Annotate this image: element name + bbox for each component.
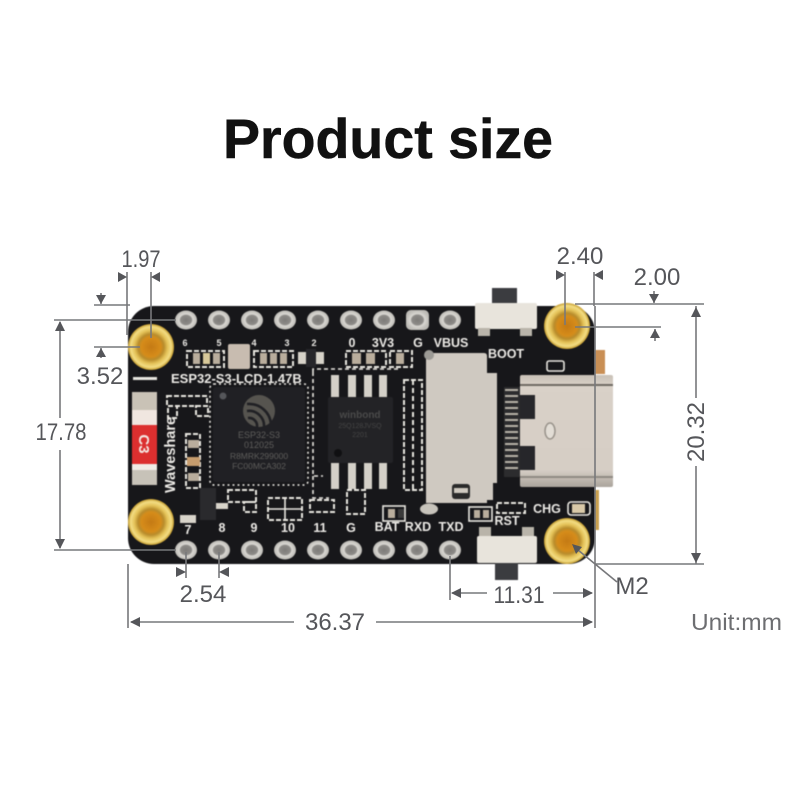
gold mounting holes (128, 303, 590, 564)
silkscreen pin labels: 8 (219, 521, 226, 535)
Waveshare silkscreen: Waveshare (163, 417, 179, 493)
silkscreen pin labels: BAT (375, 520, 400, 534)
dimension 2.54 (176, 552, 229, 608)
silkscreen pin labels: VBUS (434, 336, 468, 350)
dimension 36.37: 36.37 (305, 609, 365, 636)
dimension 3.52 (77, 293, 140, 390)
bottom header pads (175, 540, 461, 560)
silkscreen pin labels: 2 (311, 338, 317, 348)
silkscreen pin labels: 0 (349, 336, 356, 350)
top small components (187, 344, 412, 369)
dimension 36.37 (128, 306, 595, 636)
C3 red antenna component: C3 (135, 434, 152, 454)
dimension 11.31: 11.31 (494, 582, 544, 609)
ESP32-S3 chip (210, 384, 308, 485)
chip marking (230, 430, 288, 471)
small pad near USB top (547, 361, 564, 371)
silkscreen pin labels: BOOT (488, 347, 524, 361)
RST switch (477, 527, 537, 580)
CHG and RST small components (420, 350, 590, 521)
dimension 2.40: 2.40 (557, 243, 603, 270)
silkscreen pin labels: 3 (284, 338, 290, 348)
callout M2 (572, 544, 649, 600)
bottom small components (180, 488, 405, 523)
silkscreen pin labels: 5 (216, 338, 222, 348)
dimension 20.32: 20.32 (683, 402, 710, 462)
silkscreen pin labels: 11 (313, 521, 327, 535)
USB-C connector (504, 375, 613, 487)
top header pads (175, 310, 461, 330)
silkscreen pin labels: G (346, 521, 356, 535)
callout M2: M2 (615, 573, 649, 600)
chip marking: FC00MCA302 (232, 461, 286, 471)
silkscreen pin labels: TXD (438, 520, 464, 534)
silkscreen pin labels: 4 (251, 338, 257, 348)
dimension 2.00 (575, 264, 704, 341)
flash chip (313, 369, 399, 498)
C3 red antenna component (132, 377, 157, 485)
silkscreen pin labels: CHG (533, 502, 561, 516)
dimension 3.52: 3.52 (77, 363, 123, 390)
silkscreen pin labels: 3V3 (372, 336, 394, 350)
board name silkscreen: ESP32-S3-LCD-1.47B (171, 371, 302, 386)
capacitor column next to flash (404, 380, 422, 490)
silkscreen pin labels: RST (494, 514, 520, 528)
silkscreen pin labels: RXD (405, 520, 431, 534)
chip marking: R8MRK299000 (230, 451, 288, 461)
flash chip: 2201 (352, 432, 368, 439)
dimension 2.40 (556, 243, 603, 325)
dimension 2.54: 2.54 (180, 581, 226, 608)
dimension 17.78: 17.78 (36, 419, 86, 446)
silkscreen pin labels (182, 336, 561, 537)
dimension 11.31 (450, 556, 593, 609)
circuit board (128, 288, 613, 580)
silkscreen pin labels: G (413, 336, 423, 350)
unit label: Unit:mm (691, 609, 782, 635)
resistor network left of chip (167, 396, 208, 488)
BOOT switch (475, 288, 537, 336)
silkscreen pin labels: 6 (182, 338, 188, 348)
orange edge component (595, 350, 605, 374)
flash chip: 25Q128JVSQ (338, 423, 382, 430)
Espressif logo (243, 395, 275, 427)
dimension 20.32 (595, 306, 710, 564)
PCB outline (128, 306, 595, 564)
flash chip: winbond (338, 410, 381, 421)
dimension 2.00: 2.00 (634, 264, 680, 291)
silkscreen pin labels: 7 (185, 523, 192, 537)
title: Product size (223, 108, 553, 170)
dimension 17.78 (36, 320, 176, 550)
chip marking: 012025 (244, 440, 274, 450)
dimension 1.97 (118, 246, 160, 338)
silkscreen pin labels: 10 (281, 521, 295, 535)
chip marking: ESP32-S3 (238, 430, 280, 440)
dimension 1.97: 1.97 (122, 246, 160, 273)
silkscreen pin labels: 9 (251, 521, 258, 535)
metal shield (426, 353, 497, 503)
